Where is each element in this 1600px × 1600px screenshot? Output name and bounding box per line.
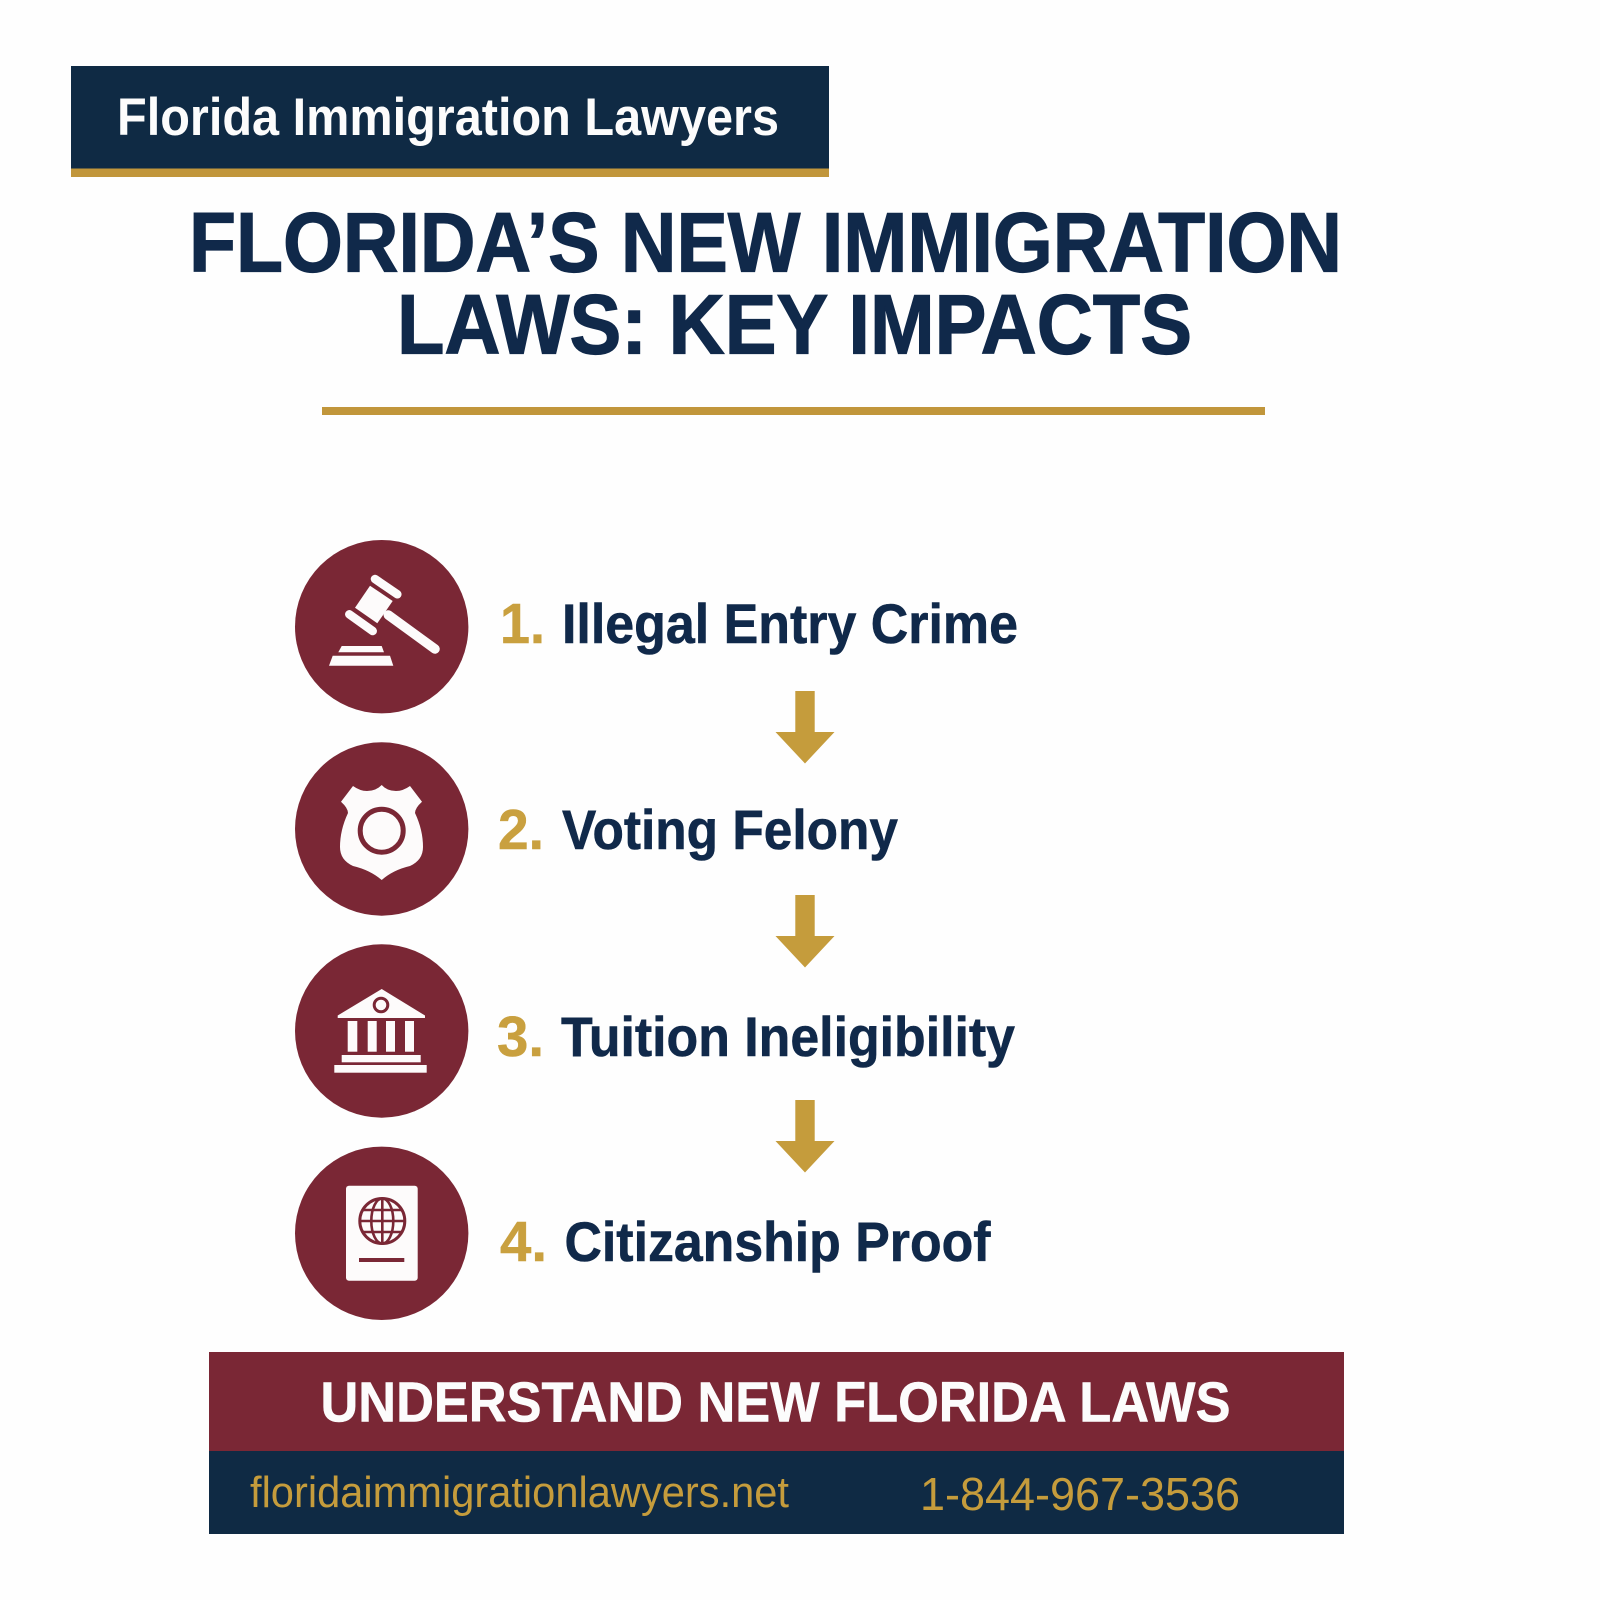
title	[189, 196, 1342, 372]
footer contact bar	[209, 1451, 1344, 1534]
label 1: Illegal Entry Crime	[562, 592, 1018, 655]
icon: badge	[340, 785, 423, 880]
number 4: 4.	[500, 1210, 547, 1274]
item 4: citizenship proof	[295, 1147, 991, 1320]
footer call to action: UNDERSTAND NEW FLORIDA LAWS	[320, 1370, 1230, 1434]
number 1: 1.	[500, 592, 545, 656]
title divider	[322, 407, 1265, 415]
item 2: voting felony	[295, 742, 898, 916]
label 4: Citizanship Proof	[564, 1210, 991, 1273]
header banner	[71, 66, 829, 177]
icon: gavel	[329, 579, 435, 666]
item 1: illegal entry crime	[295, 540, 1018, 713]
footer call to action	[209, 1352, 1344, 1452]
number 2: 2.	[498, 798, 544, 862]
phone number: 1-844-967-3536	[920, 1468, 1240, 1520]
label 3: Tuition Ineligibility	[561, 1005, 1015, 1068]
title: FLORIDA’S NEW IMMIGRATION	[189, 196, 1342, 290]
item 3: tuition ineligibility	[295, 944, 1015, 1118]
arrow 3	[776, 1100, 834, 1172]
website: floridaimmigrationlawyers.net	[250, 1468, 789, 1517]
label 2: Voting Felony	[562, 798, 898, 861]
title: LAWS: KEY IMPACTS	[397, 278, 1192, 372]
arrow 2	[776, 895, 834, 968]
header banner: Florida Immigration Lawyers	[117, 88, 779, 147]
number 3: 3.	[497, 1005, 544, 1069]
icon: institution building	[334, 989, 427, 1073]
icon: passport	[346, 1186, 418, 1281]
arrow 1	[776, 691, 834, 764]
